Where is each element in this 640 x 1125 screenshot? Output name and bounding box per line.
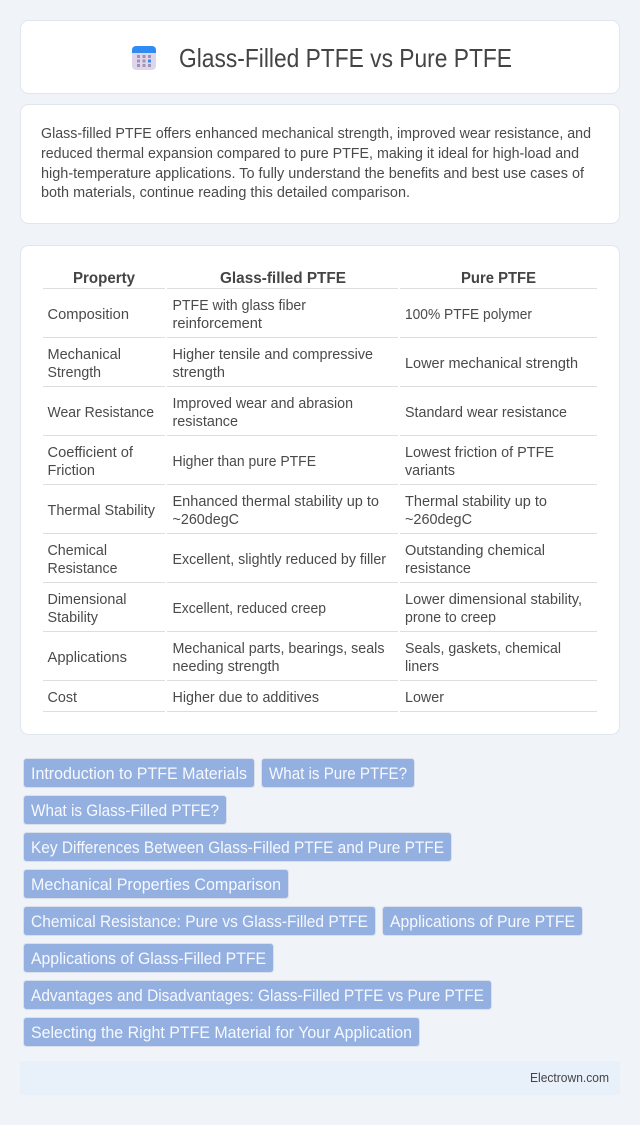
row: wear resistance: Improved wear and abrasion [172, 396, 353, 412]
row: coefficient of friction: Coefficient of [48, 445, 134, 461]
row: chemical resistance: Resistance [48, 561, 118, 577]
row: chemical resistance [48, 543, 545, 577]
table header row [73, 270, 536, 287]
row: mechanical strength: Higher tensile and compressive [172, 347, 373, 363]
row: cost: Cost [48, 690, 77, 706]
row: composition: 100% PTFE polymer [405, 307, 532, 323]
row: applications: needing strength [172, 659, 280, 675]
text block: introduction paragraph: both materials, continue reading this detailed comparison. [41, 185, 410, 201]
table header row: Property [73, 270, 135, 287]
chip: selecting the right material [24, 1018, 420, 1046]
chip: advantages and disadvantages [24, 980, 492, 1010]
chip: key differences [24, 832, 452, 862]
row: thermal stability: ~260degC [405, 512, 472, 528]
row: composition: Composition [48, 307, 129, 323]
row: mechanical strength: Lower mechanical strength [405, 356, 578, 372]
table header row: Glass-filled PTFE [220, 270, 346, 287]
row: wear resistance: Wear Resistance [48, 405, 154, 421]
table header row: Pure PTFE [461, 270, 536, 287]
row: composition: reinforcement [172, 316, 262, 332]
row: coefficient of friction [48, 445, 554, 479]
row: dimensional stability: prone to creep [405, 610, 496, 626]
chip: advantages and disadvantages: Advantages and Disadvantages: Glass-Filled PTFE vs Pure PTFE [31, 986, 484, 1005]
row: cost: Lower [405, 690, 444, 706]
row: applications: liners [405, 659, 439, 675]
chip: mechanical properties: Mechanical Properties Comparison [31, 875, 281, 894]
panel: title header [20, 20, 620, 94]
chip: chemical resistance [24, 906, 376, 936]
row: thermal stability: Enhanced thermal stability up to [172, 494, 379, 510]
row: applications: Applications [48, 650, 127, 666]
row: applications [48, 641, 561, 675]
row: composition: PTFE with glass fiber [172, 298, 306, 314]
row: chemical resistance: Outstanding chemical [405, 543, 545, 559]
row: thermal stability: Thermal stability up to [405, 494, 547, 510]
row: mechanical strength [48, 347, 578, 381]
row: coefficient of friction: Higher than pure PTFE [172, 454, 316, 470]
footer [20, 1061, 620, 1095]
row: wear resistance: resistance [172, 414, 238, 430]
row: applications: Seals, gaskets, chemical [405, 641, 561, 657]
text block: introduction paragraph [41, 126, 591, 201]
title: Glass-Filled PTFE vs Pure PTFE [179, 43, 512, 73]
text block: introduction paragraph: Glass-filled PTFE offers enhanced mechanical strength, improved wear resistance, and [41, 126, 591, 142]
chip: what is pure PTFE: What is Pure PTFE? [269, 764, 407, 783]
row: chemical resistance: Chemical [48, 543, 107, 559]
chip: introduction [24, 758, 254, 788]
row: mechanical strength: Mechanical [48, 347, 121, 363]
footer: Electrown.com [530, 1070, 609, 1085]
row: mechanical strength: strength [172, 365, 225, 381]
chip: applications of glass-filled PTFE: Applications of Glass-Filled PTFE [31, 949, 266, 968]
row: coefficient of friction: Lowest friction of PTFE [405, 445, 554, 461]
row: wear resistance: Standard wear resistance [405, 405, 567, 421]
row: dimensional stability: Stability [48, 610, 99, 626]
row: composition [48, 298, 532, 332]
chip: what is pure PTFE [262, 758, 414, 788]
row: coefficient of friction: variants [405, 463, 455, 479]
row: cost [48, 690, 444, 706]
chip: applications of pure PTFE: Applications of Pure PTFE [390, 912, 575, 931]
row: mechanical strength: Strength [48, 365, 101, 381]
icon: calendar [132, 46, 156, 70]
row: thermal stability: Thermal Stability [48, 503, 156, 519]
row: applications: Mechanical parts, bearings, seals [172, 641, 384, 657]
row: dimensional stability: Excellent, reduced creep [172, 601, 326, 617]
chip: what is glass-filled PTFE: What is Glass-Filled PTFE? [31, 801, 219, 820]
chip: key differences: Key Differences Between Glass-Filled PTFE and Pure PTFE [31, 838, 444, 857]
row: thermal stability: ~260degC [172, 512, 239, 528]
topic links [24, 758, 582, 1046]
row: chemical resistance: Excellent, slightly reduced by filler [172, 552, 386, 568]
row: dimensional stability: Lower dimensional stability, [405, 592, 582, 608]
row: dimensional stability: Dimensional [48, 592, 126, 608]
chip: introduction: Introduction to PTFE Materials [31, 764, 247, 783]
text block: introduction paragraph: high-temperature applications. To fully understand the benefits and best use cases of [41, 166, 585, 182]
text block: introduction paragraph: reduced thermal expansion compared to pure PTFE, making it ideal for high-load and [41, 146, 579, 162]
chip: what is glass-filled PTFE [24, 796, 226, 824]
row: cost: Higher due to additives [172, 690, 319, 706]
row: wear resistance [48, 396, 567, 430]
chip: selecting the right material: Selecting the Right PTFE Material for Your Application [31, 1023, 412, 1042]
row: dimensional stability [48, 592, 582, 626]
row: thermal stability [48, 494, 547, 528]
chip: chemical resistance: Chemical Resistance: Pure vs Glass-Filled PTFE [31, 912, 368, 931]
panel: introduction [20, 104, 620, 224]
chip: applications of pure PTFE [382, 906, 582, 936]
panel: comparison table [20, 246, 620, 734]
row: chemical resistance: resistance [405, 561, 471, 577]
chip: applications of glass-filled PTFE [24, 944, 274, 972]
row: coefficient of friction: Friction [48, 463, 95, 479]
chip: mechanical properties [24, 870, 288, 898]
